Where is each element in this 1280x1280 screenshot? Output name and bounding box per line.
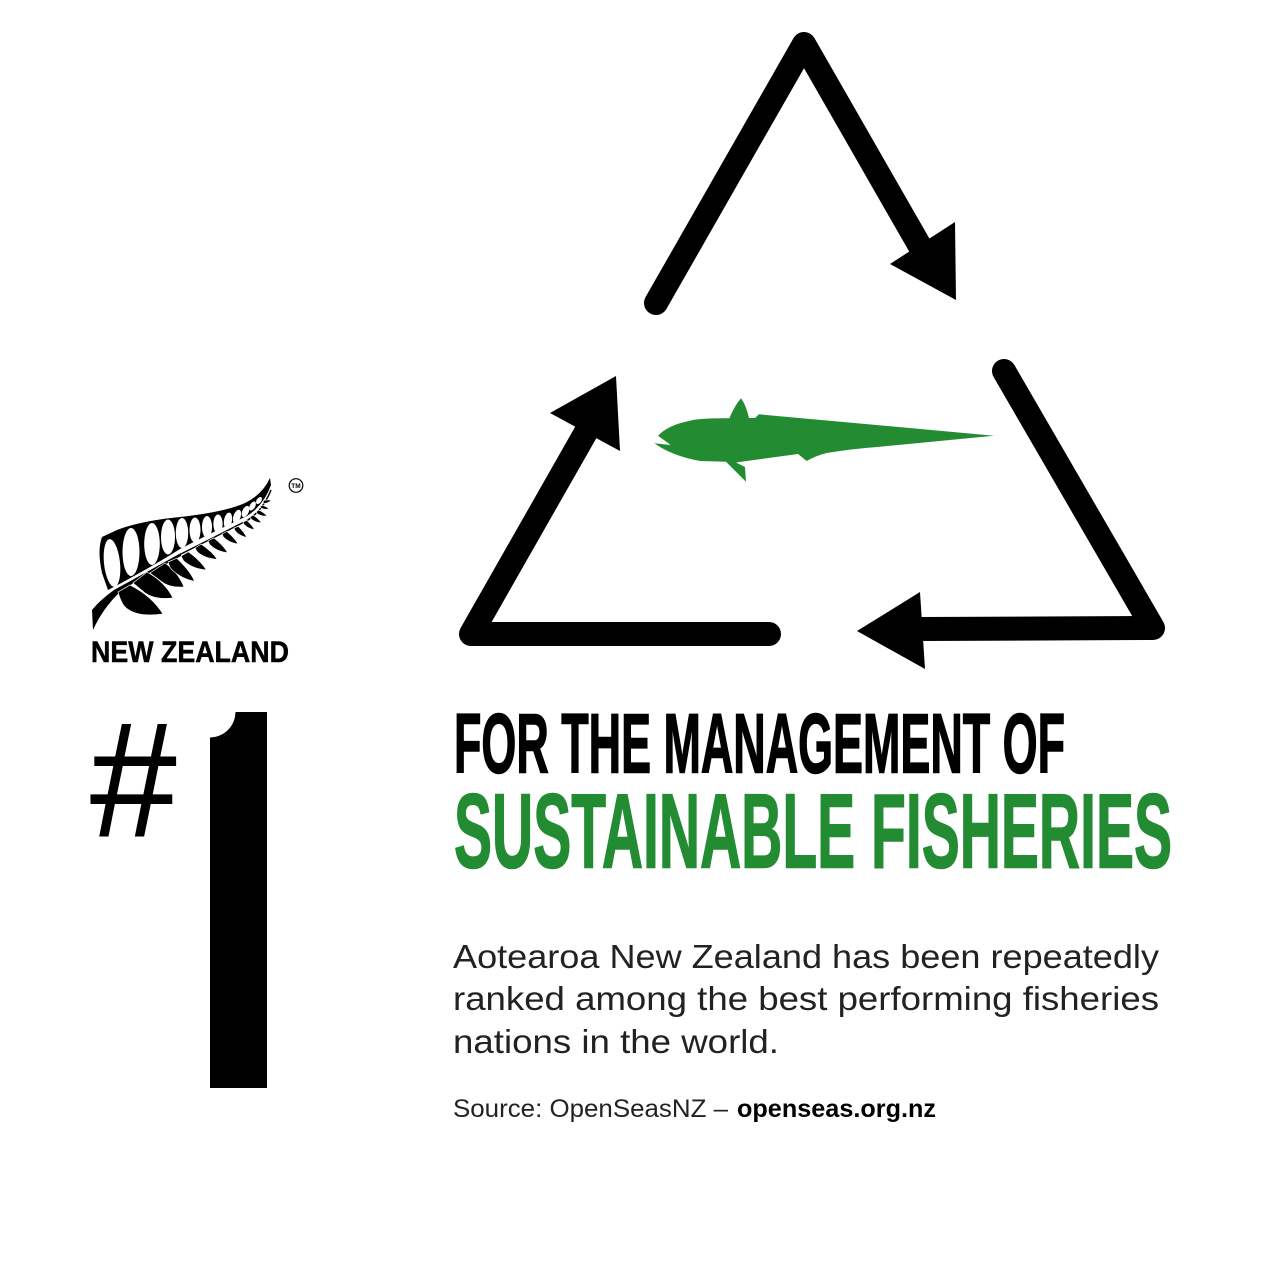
arrow: top side of recycling triangle (656, 44, 956, 303)
body text: ranked among the best performing fisheries (453, 980, 1159, 1017)
source line (453, 1095, 936, 1123)
logo: New Zealand silver fern (91, 478, 303, 669)
arrow: left side of recycling triangle (471, 376, 769, 634)
icon: green fish (654, 398, 994, 482)
icon: fern (92, 478, 272, 630)
numeral one: 1 (70, 584, 387, 1221)
arrow: right side of recycling triangle (857, 371, 1153, 669)
source line: openseas.org.nz (737, 1095, 936, 1123)
body text: Aotearoa New Zealand has been repeatedly (453, 938, 1160, 975)
big rank number (90, 712, 267, 1088)
icon: trademark mark (289, 479, 303, 492)
icon: trademark mark: TM (291, 483, 301, 490)
body text (453, 938, 1160, 1060)
logo wordmark: NEW ZEALAND (91, 636, 289, 669)
body text: nations in the world. (453, 1023, 779, 1060)
heading (454, 696, 1172, 890)
source line: Source: OpenSeasNZ – (453, 1095, 728, 1123)
hash sign: # (90, 688, 176, 871)
